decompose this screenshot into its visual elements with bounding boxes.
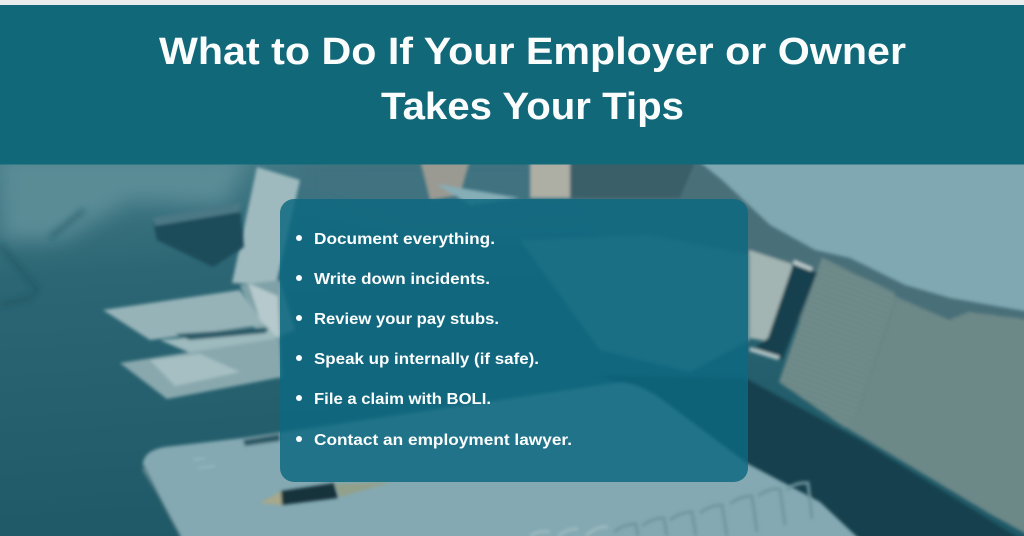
standing banknote (232, 167, 300, 345)
list item: document everything: Document everything. (314, 231, 495, 248)
list item: write down incidents: Write down incidents. (314, 271, 490, 288)
watch band (752, 262, 817, 360)
list item: speak up internally: Speak up internally (if safe). (314, 351, 539, 368)
wall (695, 160, 1024, 325)
title (159, 31, 906, 128)
phone (153, 203, 244, 267)
hand and wrist (749, 250, 792, 342)
desk under the arm (600, 375, 1024, 536)
list item: contact a lawyer: Contact an employment lawyer. (314, 432, 572, 449)
title: Takes Your Tips (381, 86, 684, 128)
notebook spiral binding (530, 483, 812, 536)
title: What to Do If Your Employer or Owner (159, 31, 906, 73)
panel: action list (280, 199, 748, 482)
pen (260, 482, 392, 505)
notebook (143, 382, 860, 536)
header banner (0, 5, 1024, 164)
list item: file a claim: File a claim with BOLI. (314, 391, 491, 408)
dark fuzzy upper arm edge (560, 160, 1024, 345)
background photo: desk with money, notebook and arm (0, 155, 1024, 536)
list item: review pay stubs: Review your pay stubs. (314, 311, 499, 328)
banknotes on the desk (103, 283, 282, 399)
sweater body (845, 300, 1024, 536)
sweater underlayer (779, 258, 1024, 536)
sweater cuff (779, 258, 895, 428)
top light strip (0, 0, 1024, 5)
